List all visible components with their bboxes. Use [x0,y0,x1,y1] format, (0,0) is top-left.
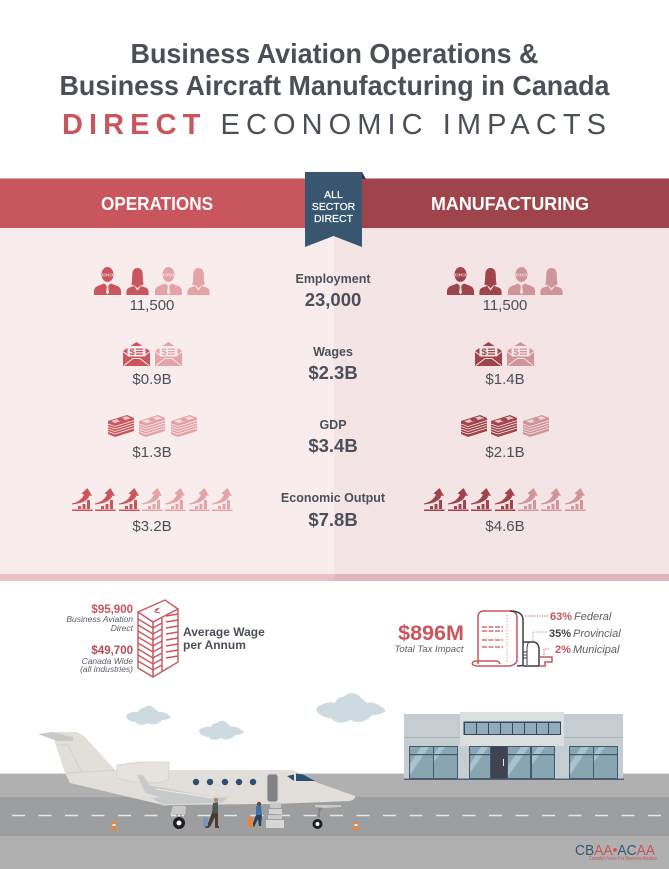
tax total [394,621,464,655]
average wage labels: Canada Wide [82,656,133,666]
tax breakdown: municipal: 2% [555,644,571,656]
label: average wage per annum: per Annum [183,638,246,652]
average wage labels: $95,900 [91,604,133,616]
average wage labels: Direct [111,623,134,633]
airport terminal [404,712,624,780]
tax total: Total Tax Impact [394,644,464,655]
tax breakdown: provincial: Provincial [573,628,621,640]
stat: employment [295,272,371,310]
stat: employment: Employment [295,272,371,286]
clouds [126,693,386,740]
ribbon: all sector direct: DIRECT [314,213,354,225]
value: operations employment: 11,500 [130,297,174,314]
stat: gdp: GDP [319,418,347,432]
value: manufacturing wages: $1.4B [485,371,525,388]
title [60,38,610,101]
tax breakdown: provincial [549,628,621,640]
average wage labels: Business Aviation [66,614,133,624]
stat: wages: Wages [313,345,353,359]
tax breakdown: federal: Federal [574,611,612,623]
average wage labels [66,604,134,674]
traffic cones [110,821,360,830]
stat: economic output: $7.8B [308,509,358,530]
value: manufacturing employment: 11,500 [483,297,527,314]
ribbon: all sector direct: ALL [324,189,343,201]
passenger: man with suitcase [203,798,219,828]
heading: operations: OPERATIONS [101,193,213,214]
icon: office tower [138,600,178,677]
passenger: woman with suitcase [248,802,262,827]
subtitle: DIRECT ECONOMIC IMPACTS [62,109,606,141]
value: operations gdp: $1.3B [132,444,172,461]
average wage labels: (all industries) [80,664,133,674]
value: manufacturing economic output: $4.6B [485,518,525,535]
average wage labels: $49,700 [91,645,133,657]
stat: gdp [308,418,358,456]
value: operations economic output: $3.2B [132,518,172,535]
tax total: $896M [398,621,464,645]
panel: operations [0,178,334,581]
icons: manufacturing wages [475,342,534,366]
ground and runway [0,773,669,869]
title: Business Aircraft Manufacturing in Canada [60,70,610,101]
aircraft [38,732,355,829]
value: operations wages: $0.9B [132,371,172,388]
label: average wage per annum: Average Wage [183,625,265,639]
title: Business Aviation Operations & [130,38,538,69]
icons: operations wages [123,342,182,366]
icons: manufacturing employment [447,267,563,295]
icons: manufacturing gdp [461,415,549,437]
tax breakdown: federal: 63% [550,611,572,623]
tax breakdown leaders [525,616,550,655]
tax breakdown: provincial: 35% [549,628,571,640]
ribbon: all sector direct [305,172,366,247]
ribbon: all sector direct: SECTOR [312,201,356,213]
stat: wages: $2.3B [308,362,358,383]
logo: CBAA ACAA: CBAA•ACAA [575,843,655,859]
tax breakdown: federal [550,611,612,623]
icons: operations gdp [108,415,197,437]
stat: economic output: Economic Output [281,491,386,505]
stat: gdp: $3.4B [308,435,358,456]
panel: manufacturing [334,178,669,581]
icons: operations employment [94,267,210,295]
icon: tax receipt [472,611,552,666]
heading: manufacturing: MANUFACTURING [431,193,589,214]
value: manufacturing gdp: $2.1B [485,444,525,461]
icons: manufacturing economic output [424,488,586,511]
stat: wages [308,345,358,383]
tax breakdown: municipal: Municipal [573,644,620,656]
stat: economic output [281,491,386,530]
stat: employment: 23,000 [305,289,361,310]
icons: operations economic output [72,488,232,511]
